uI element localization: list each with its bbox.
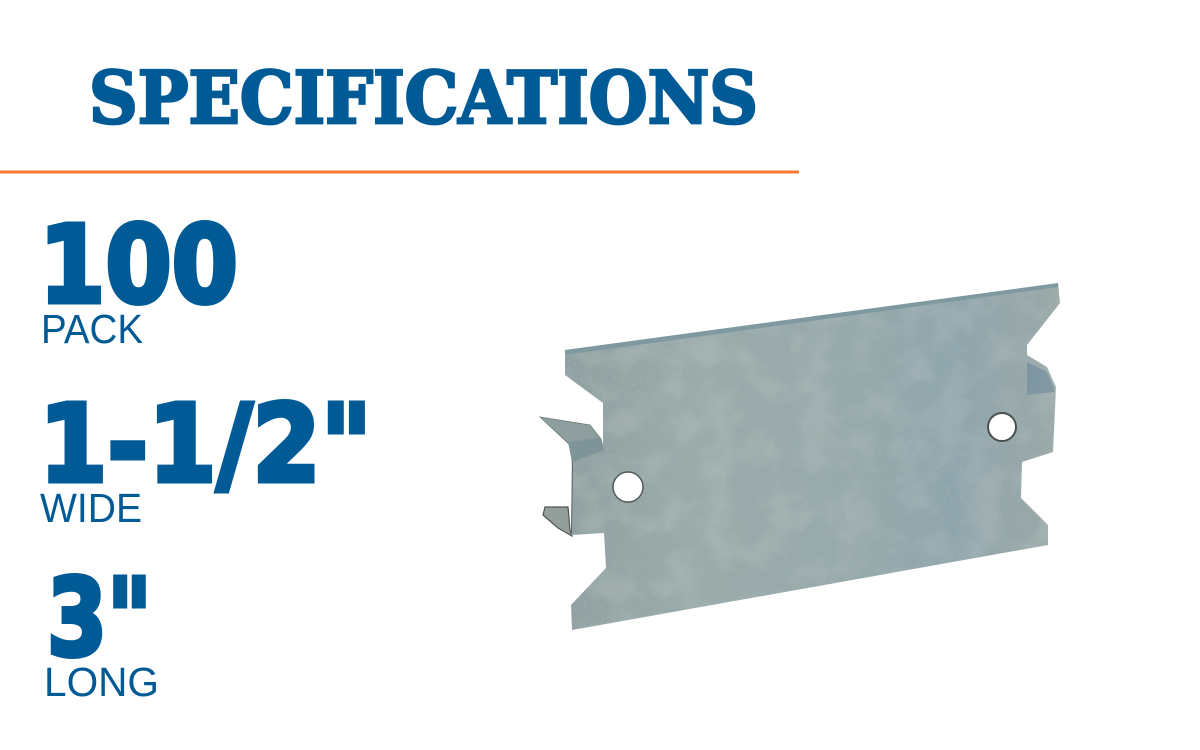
left upper tab (540, 417, 604, 462)
product photo: galvanized nail plate (530, 270, 1070, 640)
left hole (613, 472, 643, 502)
top edge highlight (565, 283, 1058, 355)
divider line (0, 170, 799, 174)
spec: 1-1/2 inch wide: 1-1/2" (39, 383, 372, 507)
spec: 1-1/2 inch wide: WIDE (40, 485, 142, 531)
title: SPECIFICATIONS (89, 55, 758, 140)
spec: 3 inch long: LONG (44, 659, 159, 705)
spec: 100 pack: 100 (39, 204, 238, 328)
right hole (988, 413, 1016, 441)
right fold shading (1027, 362, 1054, 395)
spec: 3 inch long: 3" (47, 557, 152, 681)
spec: 100 pack: PACK (41, 306, 143, 352)
upper tab bend (568, 438, 604, 462)
plate body (565, 283, 1060, 630)
left lower tab (543, 507, 572, 536)
left plate edge (571, 462, 573, 534)
